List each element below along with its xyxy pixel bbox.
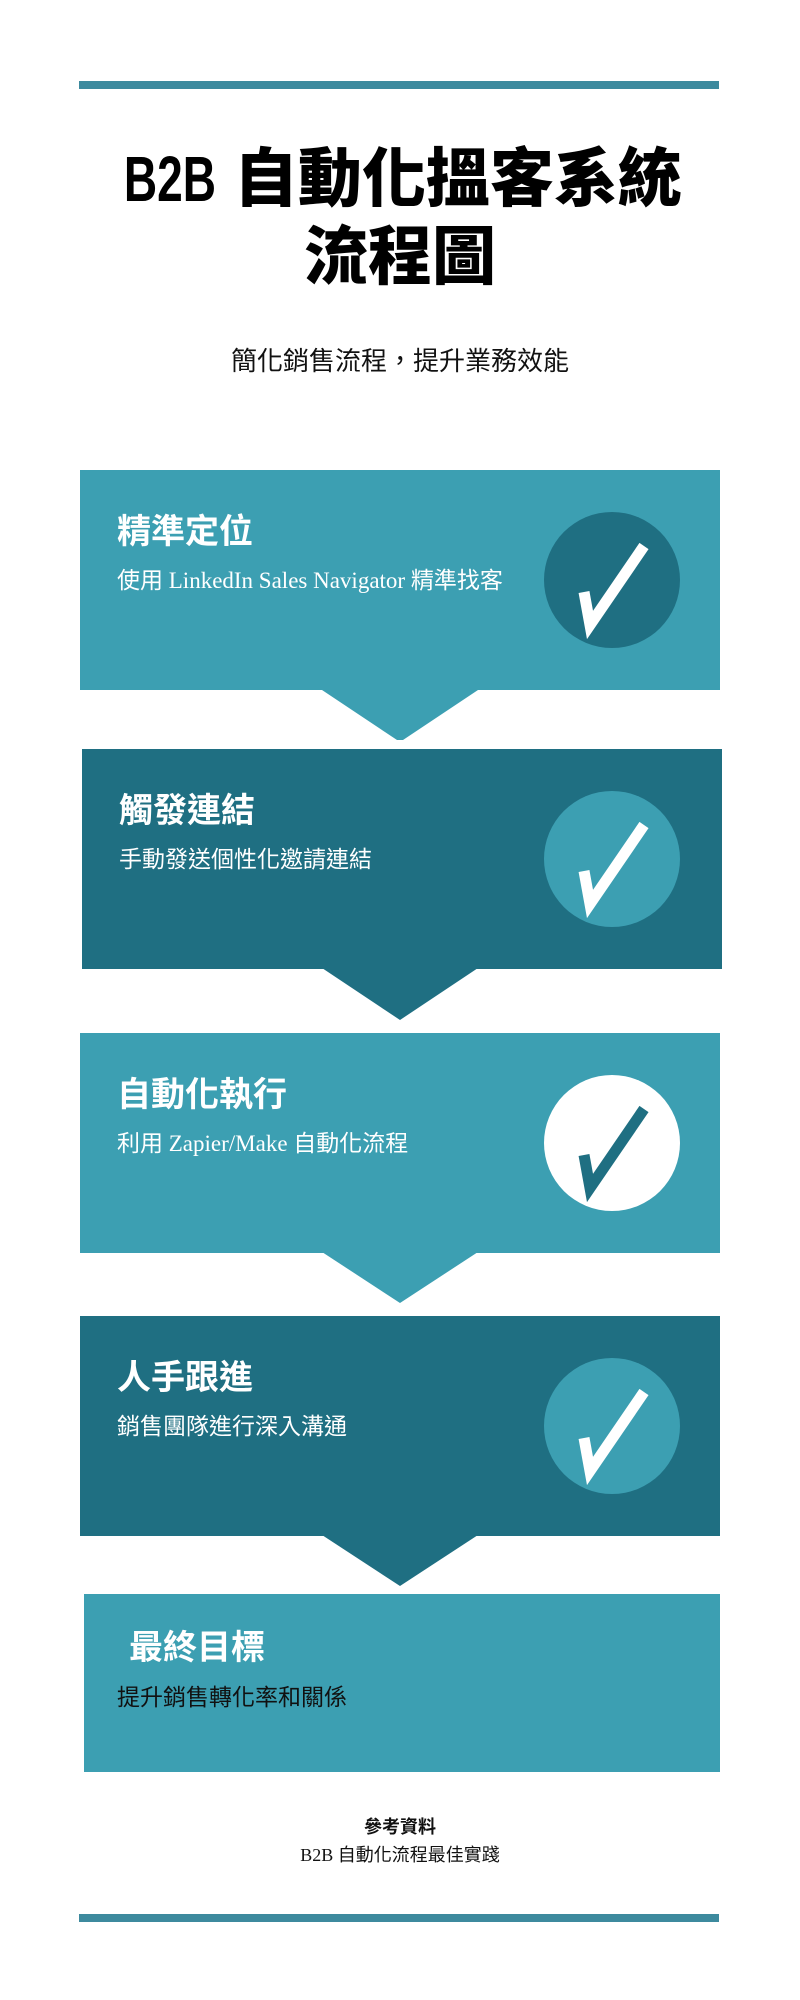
final text: 提升銷售轉化率和關係 <box>117 1685 347 1710</box>
references <box>300 1817 500 1865</box>
panel: step 4 <box>80 1316 720 1536</box>
step 3 text: 利用 Zapier/Make 自動化流程 <box>117 1131 408 1156</box>
step 4 text: 銷售團隊進行深入溝通 <box>117 1414 347 1439</box>
title <box>124 143 682 293</box>
subtitle: 簡化銷售流程，提升業務效能 <box>231 346 569 376</box>
step 3 heading: 自動化執行 <box>117 1076 287 1114</box>
step 2 heading: 觸發連結 <box>119 792 255 830</box>
title: 自動化搵客系統 <box>234 143 682 215</box>
arrow: 1 <box>322 690 478 740</box>
step 1 text: 使用 LinkedIn Sales Navigator 精準找客 <box>117 568 503 593</box>
panel: step 3 <box>80 1033 720 1253</box>
arrow: 2 <box>324 969 476 1020</box>
panel: final goal <box>84 1594 720 1772</box>
title: B2B <box>124 143 216 215</box>
references: 參考資料 <box>364 1817 436 1837</box>
arrow: 4 <box>324 1536 476 1586</box>
step 1 heading: 精準定位 <box>117 513 253 551</box>
arrow: 3 <box>324 1253 476 1303</box>
final heading: 最終目標 <box>129 1629 265 1667</box>
step 4 heading: 人手跟進 <box>117 1359 253 1397</box>
icon: check 2 <box>544 791 680 927</box>
title: 流程圖 <box>304 221 496 293</box>
panel: step 2 <box>82 749 722 969</box>
icon: check 3 <box>544 1075 680 1211</box>
references: B2B 自動化流程最佳實踐 <box>300 1845 500 1865</box>
icon: check 4 <box>544 1358 680 1494</box>
icon: check 1 <box>544 512 680 648</box>
step 2 text: 手動發送個性化邀請連結 <box>119 847 372 872</box>
panel: step 1 <box>80 470 720 690</box>
